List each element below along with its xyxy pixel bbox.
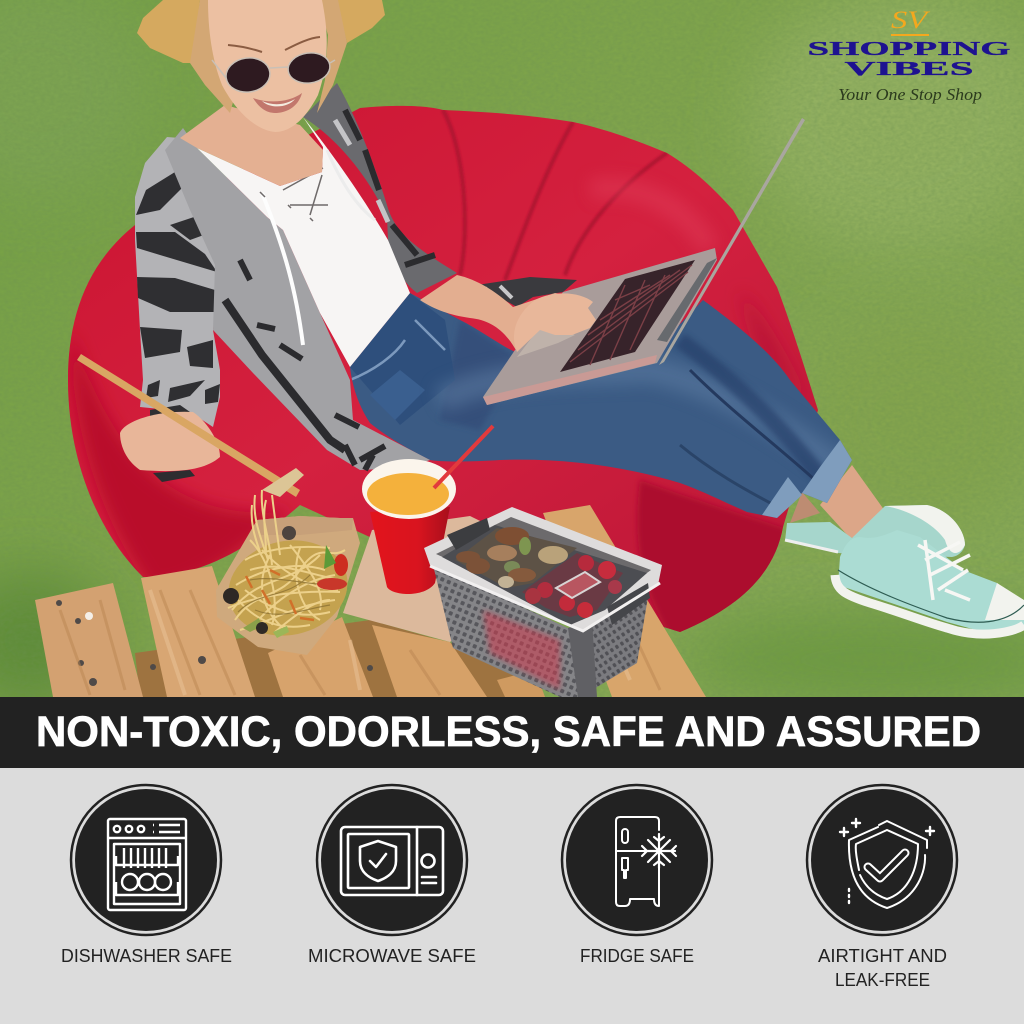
feature: microwave safe (308, 785, 476, 966)
table plank 4 (372, 625, 487, 697)
rolled jeans cuffs (802, 440, 852, 503)
table plank 3 (268, 617, 373, 697)
red bean bag (68, 106, 818, 640)
label: AIRTIGHT AND (818, 946, 947, 966)
noodles (228, 490, 345, 632)
grass lawn (0, 0, 1024, 710)
feature: dishwasher safe (61, 785, 232, 966)
sunglasses (212, 50, 335, 95)
cardigan left sleeve (135, 137, 220, 427)
woman's white top (197, 117, 410, 367)
photo scene (0, 0, 1024, 710)
woman's arm on laptop (420, 275, 559, 350)
icon: shield with check (840, 819, 934, 908)
headline band: NON-TOXIC, ODORLESS, SAFE AND ASSURED (36, 708, 981, 756)
back sneaker (785, 505, 965, 557)
label: FRIDGE SAFE (580, 946, 694, 966)
hinge (657, 258, 717, 342)
label: MICROWAVE SAFE (308, 946, 476, 966)
laptop (483, 118, 805, 405)
logo tagline: Your One Stop Shop (838, 85, 982, 104)
icon: fridge with snowflake (616, 817, 676, 906)
container lid (424, 507, 662, 630)
container side face (572, 585, 650, 697)
woman's jeans (350, 293, 852, 518)
headline band (0, 697, 1024, 768)
table plank 1 (35, 583, 143, 697)
icon: microwave (341, 827, 443, 895)
icon: dishwasher (108, 819, 186, 910)
logo: VIBES (844, 58, 974, 80)
red cup with juice (362, 426, 493, 594)
laptop base (483, 248, 717, 405)
woman's head and hat (137, 0, 385, 132)
logo (808, 7, 1011, 104)
feature: airtight and leak-free (807, 785, 957, 990)
feature: airtight and leak-free: LEAK-FREE (835, 970, 930, 990)
keyboard (560, 260, 695, 372)
woman's neck and chest (180, 105, 323, 186)
straw (434, 426, 493, 488)
noodle paper tray (216, 490, 360, 655)
table plank 5 (543, 505, 706, 697)
logo monogram: SV (891, 7, 931, 34)
smile (253, 93, 302, 113)
produce storage container (424, 507, 662, 697)
features panel (0, 768, 1024, 1024)
front sneaker (838, 553, 1024, 630)
nuts compartment (455, 527, 577, 588)
paper napkin (343, 516, 480, 642)
screen edge (659, 118, 805, 365)
logo brand name: SHOPPING (808, 38, 1011, 60)
hair (190, 0, 347, 113)
wooden table (35, 505, 706, 697)
cardigan right side (303, 83, 457, 293)
container front face (433, 565, 578, 697)
dark sleeve cuff by the hip (477, 277, 577, 307)
feature: fridge safe (562, 785, 712, 966)
cardigan front panel (165, 128, 430, 470)
woman's lower legs and shoes (785, 465, 1024, 634)
hand on the laptop (514, 293, 596, 352)
hand with chopsticks (77, 354, 304, 497)
hat brim left (137, 0, 200, 63)
hat brim right (337, 0, 385, 43)
berries compartment (522, 553, 623, 618)
woman's cardigan (135, 83, 577, 470)
container latches (447, 518, 490, 550)
table plank 2 (141, 566, 255, 697)
label: DISHWASHER SAFE (61, 946, 232, 966)
